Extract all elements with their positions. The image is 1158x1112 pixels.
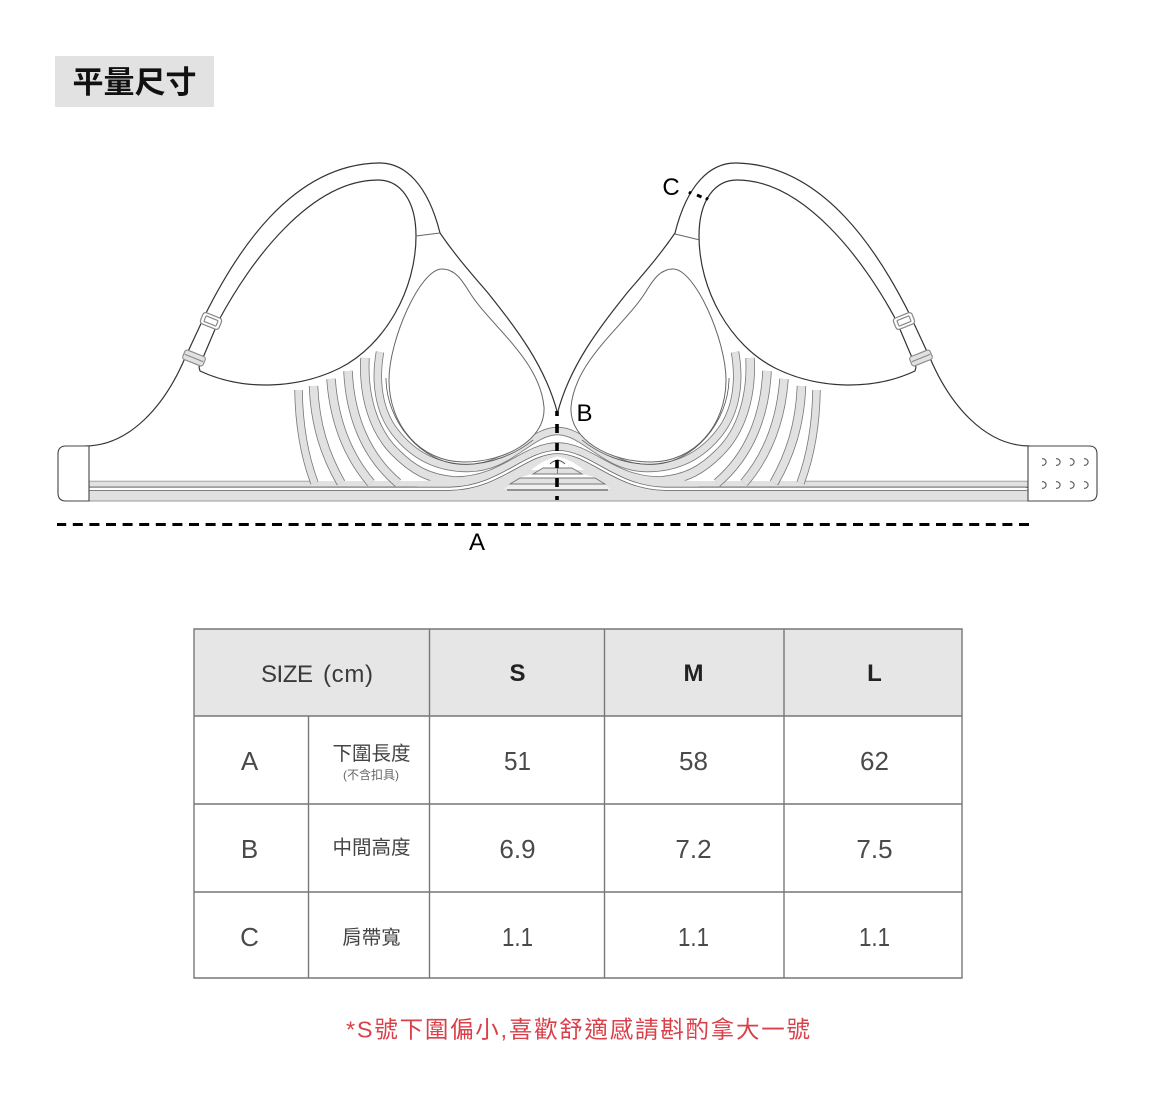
row B: 7.5 bbox=[856, 834, 893, 864]
row A: 62 bbox=[860, 746, 889, 776]
header row: S bbox=[509, 660, 526, 687]
row B: 7.2 bbox=[675, 834, 712, 864]
row C: 肩帶寬 bbox=[342, 927, 401, 949]
row C bbox=[240, 922, 890, 952]
row A bbox=[241, 743, 889, 782]
row A: 下圍長度 bbox=[332, 743, 411, 765]
sizing note: *S號下圍偏小,喜歡舒適感請斟酌拿大一號 bbox=[346, 1016, 810, 1042]
header row: M bbox=[684, 660, 704, 687]
title: 平量尺寸 bbox=[72, 65, 196, 100]
row B bbox=[241, 834, 893, 864]
measure line C bbox=[662, 174, 708, 201]
row C: 1.1 bbox=[678, 922, 709, 952]
right hook tab bbox=[1028, 446, 1097, 501]
header row: L bbox=[867, 660, 882, 687]
table header background bbox=[194, 629, 962, 716]
header row bbox=[261, 660, 882, 688]
header row: (cm) bbox=[323, 661, 373, 688]
row C: C bbox=[240, 922, 259, 952]
strap seam left bbox=[416, 233, 440, 236]
measure line A: A bbox=[469, 529, 485, 556]
under band bbox=[89, 481, 1028, 501]
left band end tab bbox=[58, 446, 89, 501]
left half of garment bbox=[85, 163, 558, 501]
measure line B bbox=[557, 400, 593, 500]
row B: 6.9 bbox=[499, 834, 536, 864]
row B: B bbox=[241, 834, 258, 864]
row A: 58 bbox=[679, 746, 708, 776]
header row: SIZE bbox=[261, 661, 313, 688]
row C: 1.1 bbox=[502, 922, 533, 952]
row C: 1.1 bbox=[859, 922, 890, 952]
row A: (不含扣具) bbox=[343, 767, 399, 782]
measure line C: C bbox=[662, 174, 680, 201]
strap seam right bbox=[675, 234, 700, 240]
row A: 51 bbox=[504, 746, 531, 776]
size table bbox=[194, 629, 962, 978]
measure line B: B bbox=[576, 400, 593, 427]
title bbox=[55, 56, 214, 107]
right half of garment bbox=[558, 163, 1030, 501]
table grid bbox=[194, 629, 962, 978]
row A: A bbox=[241, 746, 259, 776]
bra flat-measure diagram bbox=[58, 163, 1097, 501]
row B: 中間高度 bbox=[332, 837, 411, 859]
